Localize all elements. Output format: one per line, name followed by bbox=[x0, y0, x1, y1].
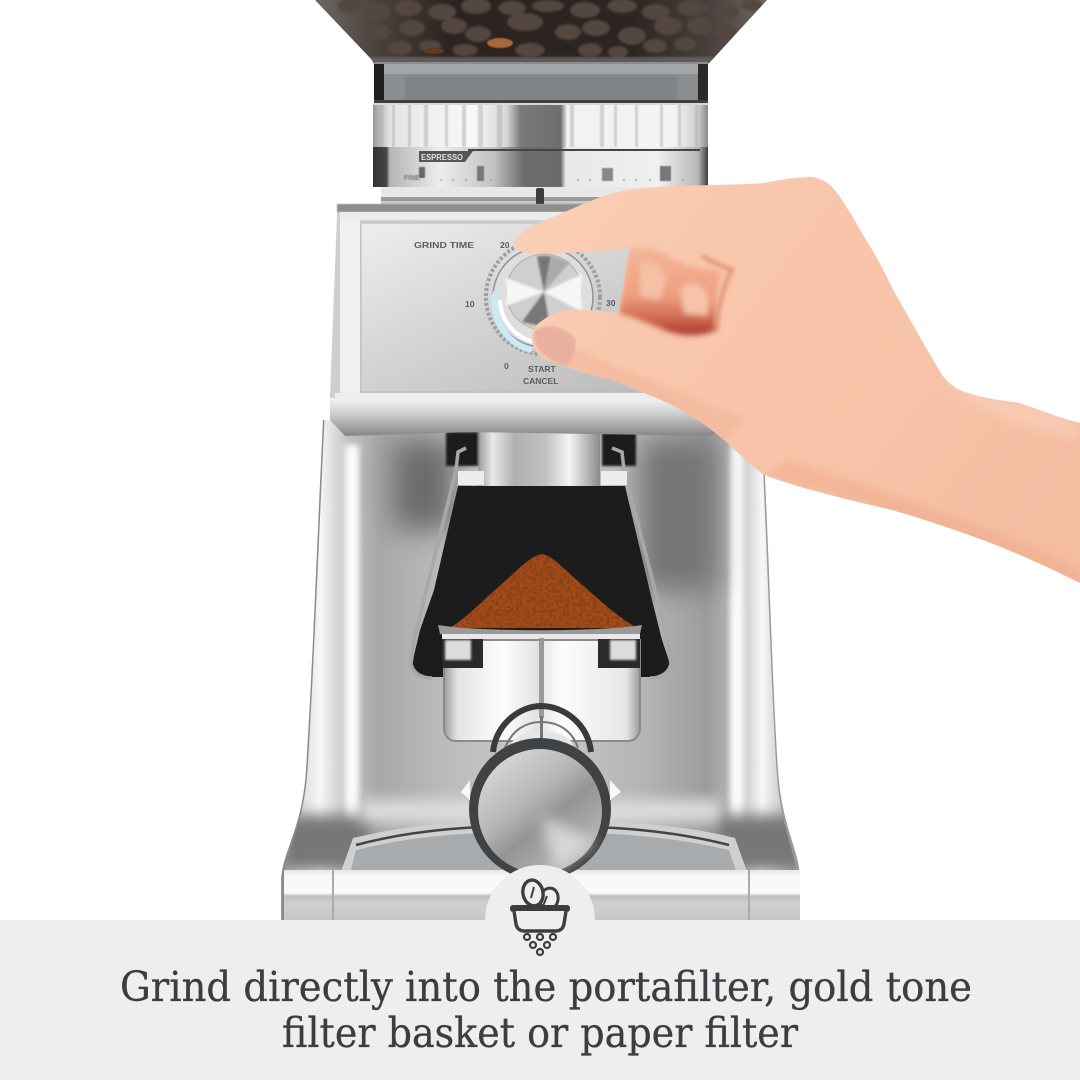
hopper collar bbox=[374, 62, 708, 103]
grind setting ring bbox=[373, 103, 708, 187]
left edge line bbox=[283, 420, 323, 920]
ground coffee pile bbox=[450, 554, 637, 628]
dial numbers: 10 bbox=[465, 299, 475, 309]
dial numbers: 0 bbox=[504, 361, 509, 371]
dial numbers: DOSE bbox=[572, 361, 596, 371]
dial numbers: 20 bbox=[500, 240, 510, 250]
chute column bbox=[478, 432, 600, 488]
highlighted bean bbox=[487, 38, 513, 48]
espresso tag bbox=[419, 151, 473, 162]
basket clips bbox=[442, 639, 640, 668]
caption text bbox=[120, 963, 972, 1057]
shelf under control panel bbox=[330, 393, 725, 436]
coffee grinder bbox=[281, 0, 1080, 920]
bean hopper bbox=[315, 0, 767, 68]
control panel bbox=[330, 204, 745, 399]
icon: coffee beans in portafilter bbox=[510, 878, 570, 955]
main lower body bbox=[281, 420, 805, 920]
caption band bbox=[0, 865, 1080, 1080]
dial numbers bbox=[465, 240, 616, 386]
dial numbers: START bbox=[528, 364, 557, 374]
espresso tag: ESPRESSO bbox=[421, 153, 463, 162]
right edge line bbox=[763, 474, 798, 870]
caption text: Grind directly into the portafilter, gold tone bbox=[120, 963, 972, 1011]
ring neck bbox=[381, 187, 701, 208]
middle and ring fingers bbox=[619, 247, 732, 335]
dial numbers: CANCEL bbox=[523, 376, 558, 386]
thumbnail bbox=[534, 326, 576, 366]
caption text: filter basket or paper filter bbox=[282, 1009, 798, 1057]
funnel frame arms bbox=[411, 432, 671, 678]
black funnel bbox=[412, 486, 670, 677]
portafilter handle bbox=[461, 706, 621, 880]
grind scale markings: FINE bbox=[404, 175, 420, 182]
grind time label: GRIND TIME bbox=[414, 240, 474, 250]
grind scale markings bbox=[404, 166, 684, 182]
hand turning dial bbox=[515, 177, 1080, 590]
base front lip bbox=[284, 870, 800, 920]
dial numbers: 30 bbox=[606, 298, 616, 308]
portafilter basket bbox=[438, 625, 642, 741]
drip tray bbox=[338, 820, 750, 880]
timer dial bbox=[486, 240, 600, 354]
